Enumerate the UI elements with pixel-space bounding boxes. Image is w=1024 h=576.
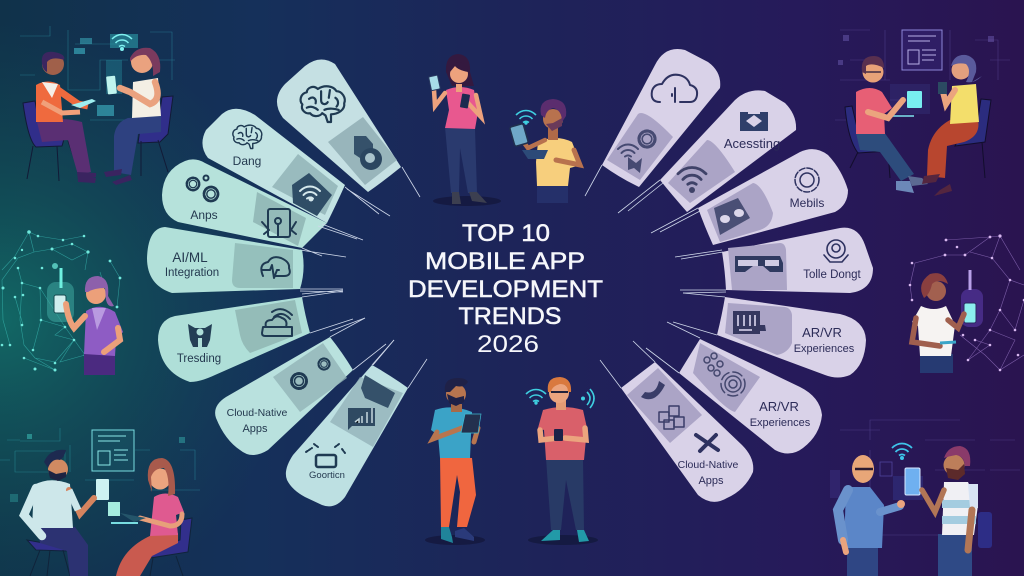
person: centre top man with tablet (510, 99, 581, 203)
label: Tresding (177, 353, 221, 365)
phone capsule (961, 289, 983, 327)
icon: cross (696, 435, 718, 451)
icon: spiral (721, 372, 745, 396)
label: Mebils (790, 196, 824, 210)
chair left (23, 101, 78, 181)
panel: right 1 cloud (585, 49, 720, 196)
panel: right 7 Cloud-Native (600, 360, 753, 502)
label: Cloud-Native (678, 459, 739, 471)
label: Experiences (750, 417, 811, 429)
panel: right 3 Mebils (651, 149, 848, 245)
woman (922, 55, 982, 196)
panel: right 6 AR/VR (633, 339, 822, 454)
icon: gears (187, 176, 218, 201)
icon: network cluster (704, 353, 723, 376)
title: DEVELOPMENT (408, 276, 603, 303)
person right (104, 48, 161, 185)
title: 2026 (477, 331, 539, 358)
icon: gear (639, 131, 655, 147)
phone (96, 479, 109, 500)
panel: right 4 Tolle Dongt (675, 228, 873, 293)
scene: right network with woman and phone (909, 234, 1024, 373)
panel: right 5 AR/VR (667, 293, 866, 378)
icon: wifi pentagon (292, 173, 332, 216)
label: AR/VR (759, 399, 799, 414)
woman (84, 353, 115, 375)
label: Anps (190, 208, 218, 222)
icon: mask (714, 198, 750, 235)
icon: speaker (628, 157, 642, 173)
scene: top-right seated pair (835, 30, 1010, 196)
person: centre bottom man with tablet (425, 378, 485, 545)
label: AR/VR (802, 325, 842, 340)
icon: device (306, 444, 345, 467)
label: Integration (165, 267, 219, 279)
icon: wifi (618, 144, 638, 156)
panel: left 3 Anps (162, 159, 363, 257)
icon: cubes (659, 406, 684, 429)
title: TOP 10 (462, 220, 550, 247)
scene: left network with woman and phone (1, 230, 123, 375)
icon: brain (301, 86, 345, 122)
panel: left 1 brain (277, 59, 420, 197)
scene: bottom-left seated pair (0, 428, 200, 576)
chair right (138, 96, 173, 176)
icon: grid (733, 311, 766, 334)
title: MOBILE APP (425, 248, 585, 275)
title: TRENDS (458, 303, 562, 330)
label: Apps (242, 423, 268, 435)
label: Experiences (794, 343, 855, 355)
man (24, 450, 94, 576)
network lines (2, 232, 120, 370)
man (856, 56, 928, 193)
person: centre bottom man with phone (526, 377, 598, 545)
icon: figure ring (824, 240, 848, 262)
icon: hub figure (188, 324, 212, 347)
label: Cloud-Native (227, 407, 288, 419)
icon: rss globe (354, 136, 382, 170)
icon: wifi (678, 168, 706, 193)
network lines (910, 236, 1024, 370)
title (408, 220, 603, 358)
label: AI/ML (172, 250, 208, 265)
man left (838, 455, 905, 576)
woman chair (150, 518, 192, 576)
man chair (27, 540, 70, 576)
chairs (845, 106, 890, 178)
label: Tolle Dongt (803, 269, 862, 281)
icon: target (795, 168, 819, 192)
icon: robot tablet (262, 209, 296, 237)
woman (920, 354, 953, 373)
scene: bottom-right standing pair (830, 420, 1020, 576)
label: Apps (698, 475, 724, 487)
icon: gears (292, 358, 330, 388)
label: Acessting (724, 136, 780, 151)
icon: chart bubble (348, 408, 375, 430)
panel: left 5 Tresding (158, 291, 365, 382)
woman (116, 458, 184, 576)
icon: cloud wifi (262, 309, 292, 336)
label: Dang (233, 154, 261, 168)
man right (922, 446, 978, 576)
label: Goorticn (309, 470, 345, 481)
person left (36, 52, 96, 183)
phone capsule (47, 282, 74, 322)
panel: left 7 Goorticn (286, 340, 427, 506)
chair right (978, 512, 992, 548)
panel: left 6 Cloud-Native (215, 318, 394, 455)
icon: cloud upload (652, 75, 697, 102)
icon: goggles (735, 256, 783, 272)
panel: left 2 Dang (202, 109, 390, 223)
document (92, 430, 134, 471)
icon: brain (233, 125, 262, 149)
icon: mascot (361, 375, 395, 408)
icon: swoosh (641, 381, 665, 399)
icon: cloud pulse (261, 257, 290, 278)
document (902, 30, 942, 70)
panel: left 4 AI/ML (147, 227, 343, 294)
scene: top-left seated pair (20, 26, 175, 185)
panel: right 2 Acessting (618, 90, 796, 213)
icon: box (740, 110, 768, 131)
person: centre top woman with phones (429, 54, 501, 206)
